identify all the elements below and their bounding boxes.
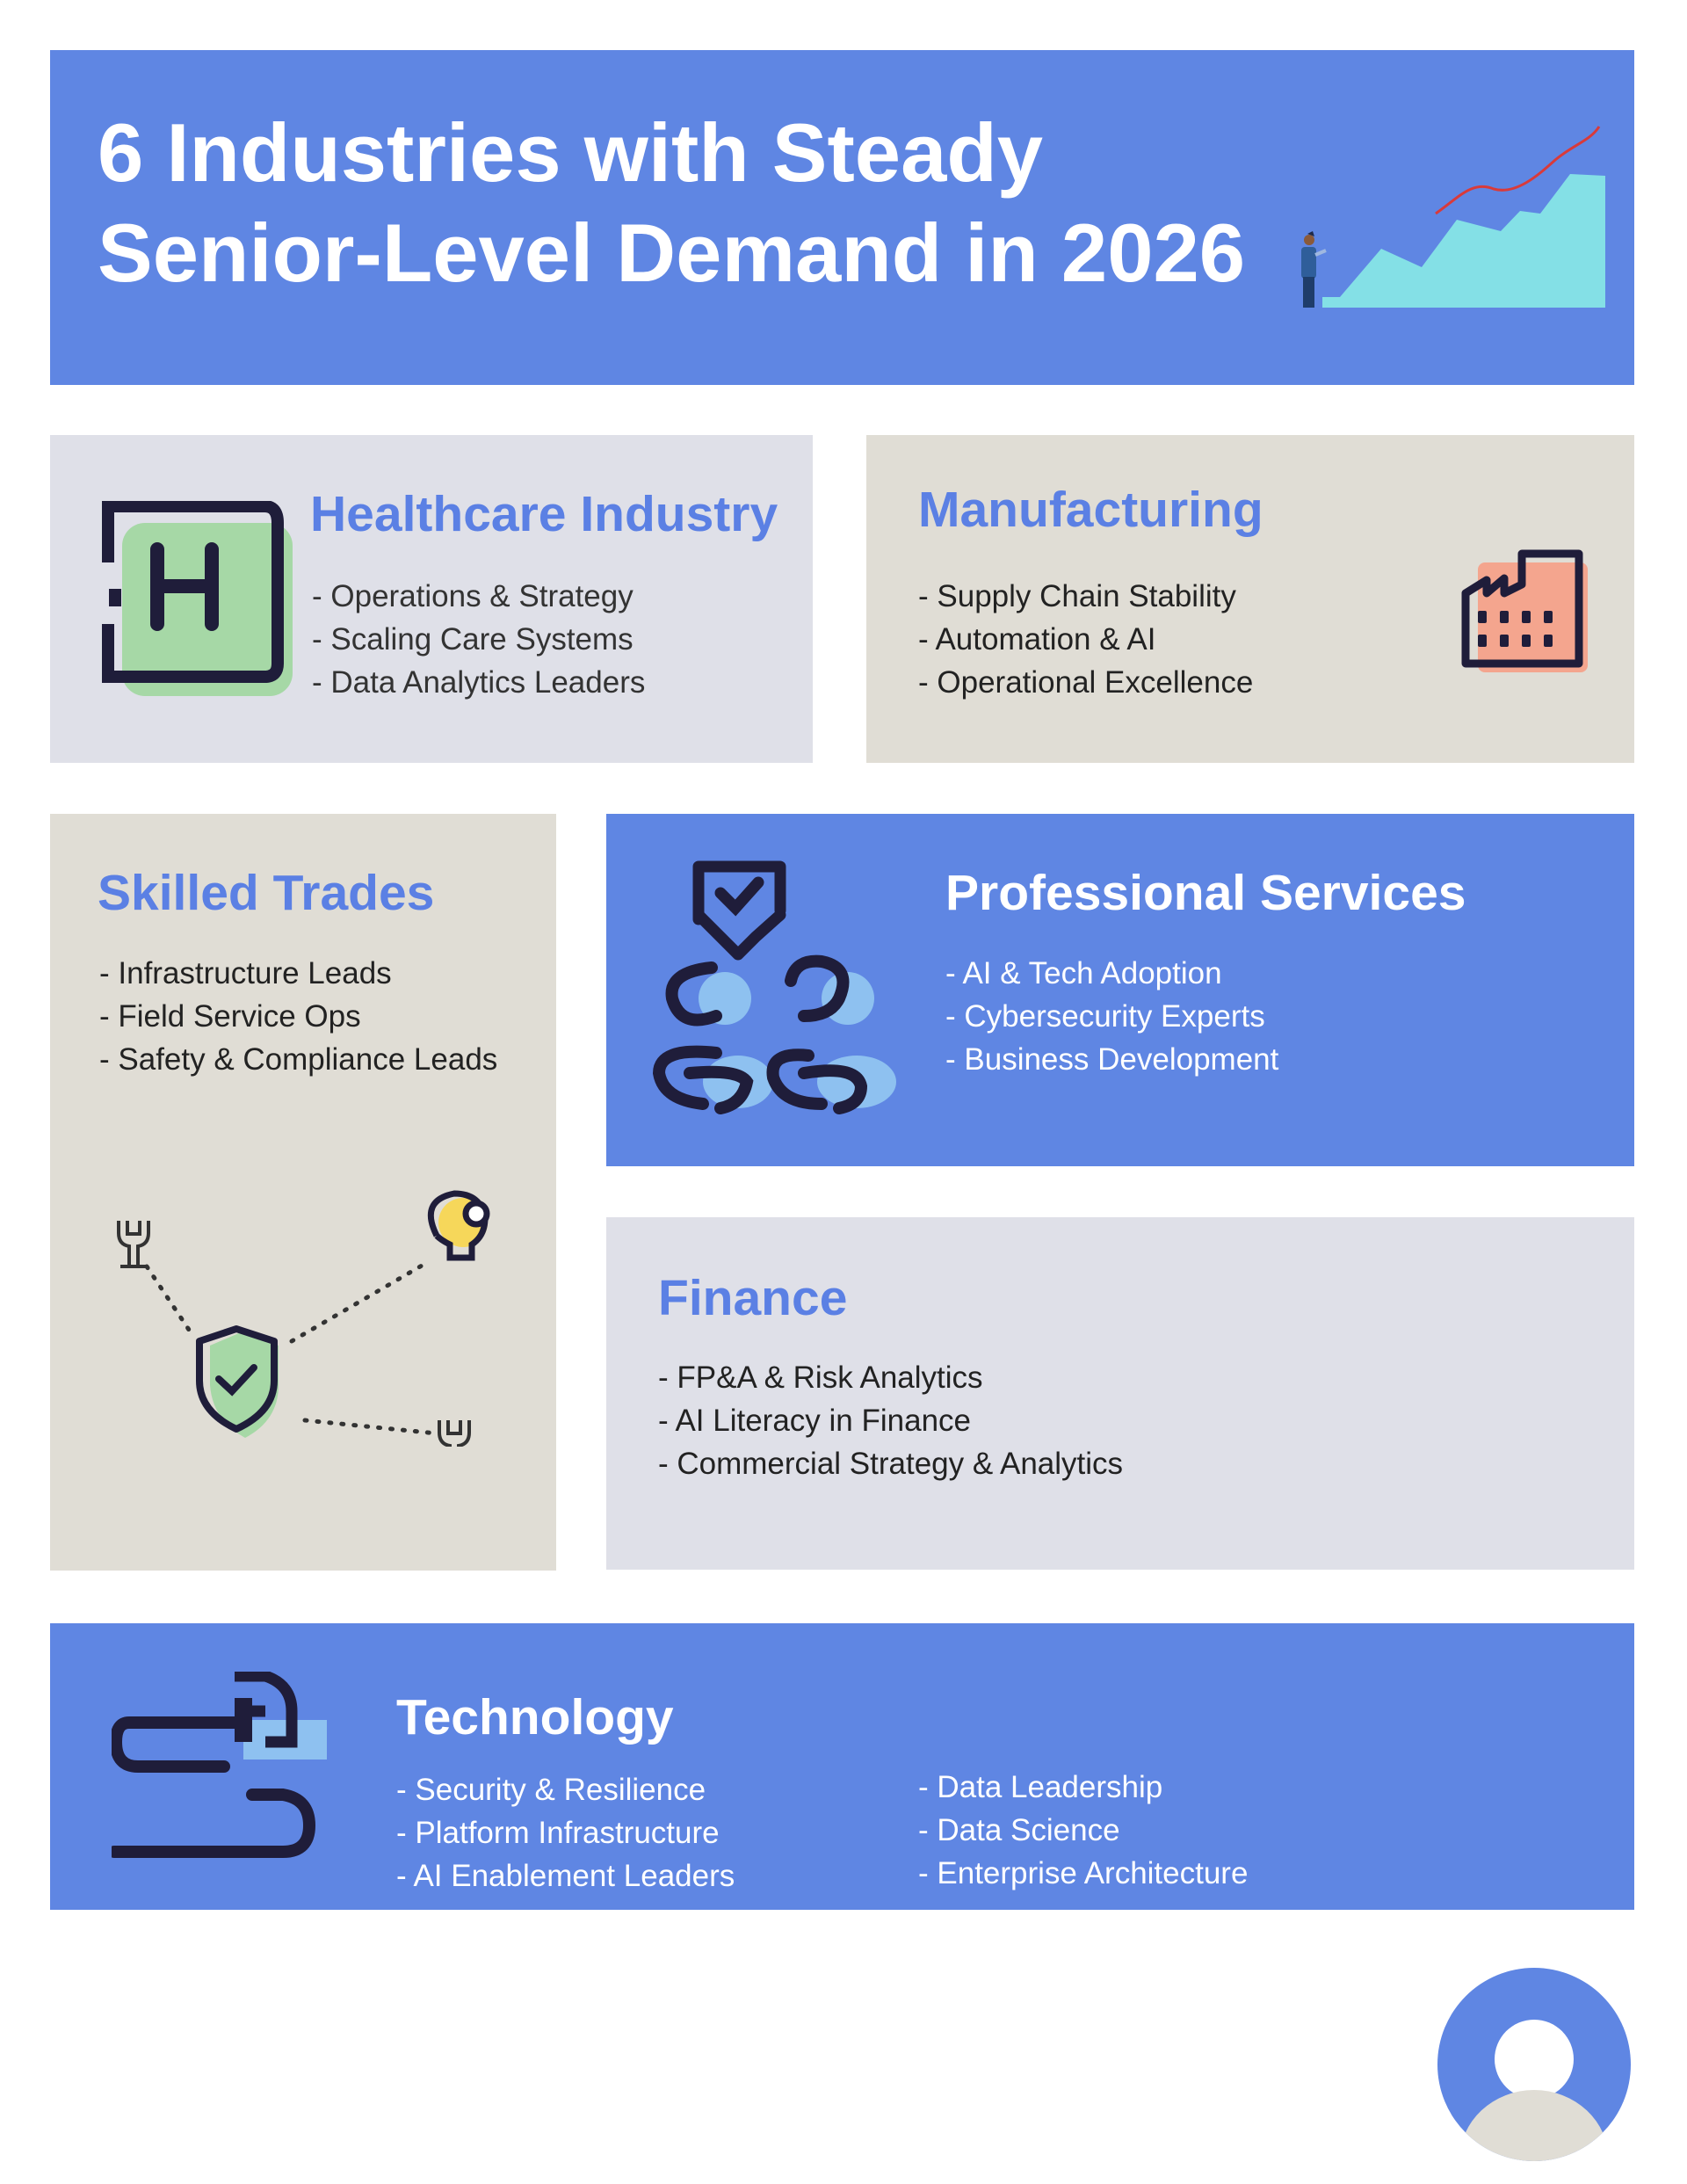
wrench 1 bbox=[119, 1221, 148, 1266]
bullets bbox=[918, 579, 1253, 700]
bullets bbox=[945, 956, 1279, 1077]
bullets col1: - Security & Resilience bbox=[396, 1773, 706, 1807]
icon: chain and check bbox=[653, 861, 896, 1114]
heading: Healthcare Industry bbox=[310, 486, 778, 542]
illustration: growth chart bbox=[1301, 126, 1605, 308]
bullets bbox=[658, 1360, 1123, 1481]
bullets: - Commercial Strategy & Analytics bbox=[658, 1447, 1123, 1481]
bullets col2: - Data Science bbox=[918, 1813, 1120, 1847]
bullets: - Safety & Compliance Leads bbox=[99, 1042, 497, 1077]
bullets: - Scaling Care Systems bbox=[312, 622, 634, 657]
bullets: - Cybersecurity Experts bbox=[945, 999, 1265, 1034]
panel: finance bbox=[606, 1217, 1634, 1570]
panel: technology bbox=[50, 1623, 1634, 1910]
bullets bbox=[312, 579, 645, 700]
icon: factory bbox=[1462, 550, 1588, 672]
icon: hospital H bbox=[102, 501, 293, 696]
bullets col1: - Platform Infrastructure bbox=[396, 1816, 720, 1850]
bullets: - AI Literacy in Finance bbox=[658, 1404, 971, 1438]
bullets col2: - Enterprise Architecture bbox=[918, 1856, 1248, 1890]
bullets col2: - Data Leadership bbox=[918, 1770, 1162, 1804]
title panel bbox=[50, 50, 1634, 385]
heading: Finance bbox=[658, 1270, 847, 1326]
icon: cable connector bbox=[112, 1672, 327, 1858]
bullets bbox=[99, 956, 497, 1077]
bullets: - FP&A & Risk Analytics bbox=[658, 1360, 983, 1395]
icon: avatar bbox=[1437, 1968, 1631, 2161]
bullets: - AI & Tech Adoption bbox=[945, 956, 1222, 990]
panel: manufacturing bbox=[866, 435, 1634, 763]
heading: Professional Services bbox=[945, 865, 1466, 921]
bulb bbox=[438, 1198, 488, 1247]
title: 6 Industries with Steady bbox=[98, 106, 1043, 199]
shield bbox=[210, 1332, 279, 1438]
bullets col1 bbox=[396, 1773, 735, 1893]
panel: professional services bbox=[606, 814, 1634, 1166]
title bbox=[98, 106, 1245, 299]
bullets: - Business Development bbox=[945, 1042, 1278, 1077]
bullets col2 bbox=[918, 1770, 1248, 1890]
bullets col1: - AI Enablement Leaders bbox=[396, 1859, 735, 1893]
bullets: - Supply Chain Stability bbox=[918, 579, 1236, 613]
heading: Skilled Trades bbox=[98, 865, 434, 921]
bullets: - Operational Excellence bbox=[918, 665, 1253, 700]
bullets: - Data Analytics Leaders bbox=[312, 665, 645, 700]
illustration: network of tools bbox=[117, 1190, 490, 1447]
bullets: - Infrastructure Leads bbox=[99, 956, 392, 990]
bullets: - Field Service Ops bbox=[99, 999, 361, 1034]
panel: skilled trades bbox=[50, 814, 556, 1571]
heading: Technology bbox=[396, 1689, 674, 1745]
title: Senior-Level Demand in 2026 bbox=[98, 207, 1245, 299]
bullets: - Automation & AI bbox=[918, 622, 1155, 657]
panel: healthcare bbox=[50, 435, 813, 763]
heading: Manufacturing bbox=[918, 482, 1263, 538]
bullets: - Operations & Strategy bbox=[312, 579, 634, 613]
wrench 2 bbox=[439, 1420, 469, 1466]
